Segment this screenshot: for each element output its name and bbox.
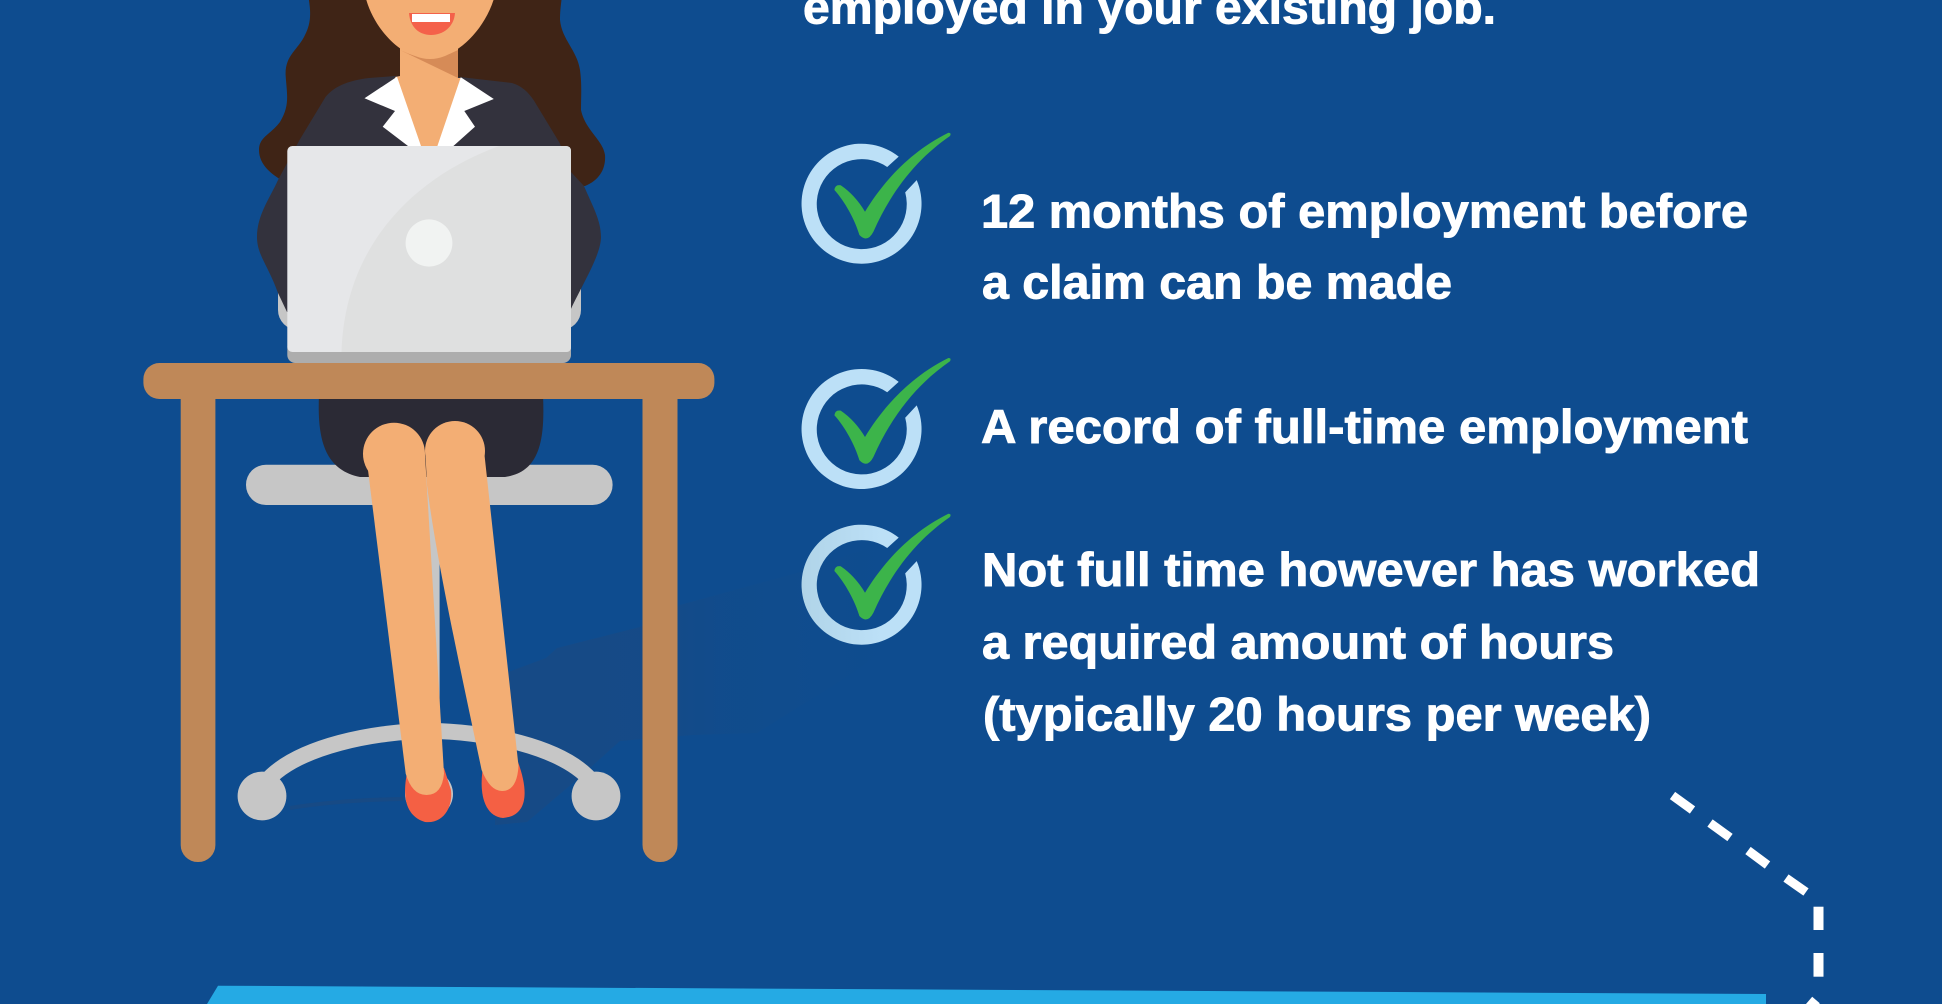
- icon: check in ring: [802, 133, 951, 264]
- chair pole: [425, 477, 440, 735]
- laptop: [287, 146, 571, 363]
- text: 12 months: [981, 184, 1748, 308]
- chair back: [278, 240, 581, 330]
- illustration: woman working on a laptop at a desk: [143, 0, 714, 862]
- text: full-time record: A record of full-time employment: [981, 400, 1748, 453]
- neck shadow: [400, 50, 458, 78]
- checklist item 3: [802, 514, 1760, 740]
- next panel: light blue band: [207, 986, 1766, 1004]
- neck: [395, 40, 462, 148]
- arrow: dashed connector: [1672, 796, 1818, 1004]
- icon: check in ring: [802, 514, 951, 645]
- text: 12 months: a claim can be made: [982, 255, 1452, 308]
- checklist item 2: [802, 358, 1748, 489]
- hair: [259, 0, 605, 186]
- icon: check in ring: [802, 358, 951, 489]
- legs: [363, 421, 518, 795]
- text: required hours: [982, 543, 1760, 740]
- checklist item 1: [802, 133, 1748, 308]
- desk: [143, 363, 714, 862]
- face: [365, 0, 495, 59]
- chair seat: [246, 465, 613, 505]
- floor shadow: [290, 540, 890, 825]
- jacket: [257, 76, 601, 312]
- skirt: [319, 395, 543, 477]
- text: required hours: (typically 20 hours per week): [983, 687, 1651, 740]
- text: required hours: a required amount of hours: [982, 616, 1614, 668]
- chair base: [238, 731, 620, 820]
- mouth: [409, 13, 455, 35]
- text: required hours: Not full time however has worked: [982, 543, 1760, 596]
- shoes: [405, 762, 525, 822]
- text: 12 months: 12 months of employment before: [981, 184, 1748, 237]
- collar: [364, 77, 494, 146]
